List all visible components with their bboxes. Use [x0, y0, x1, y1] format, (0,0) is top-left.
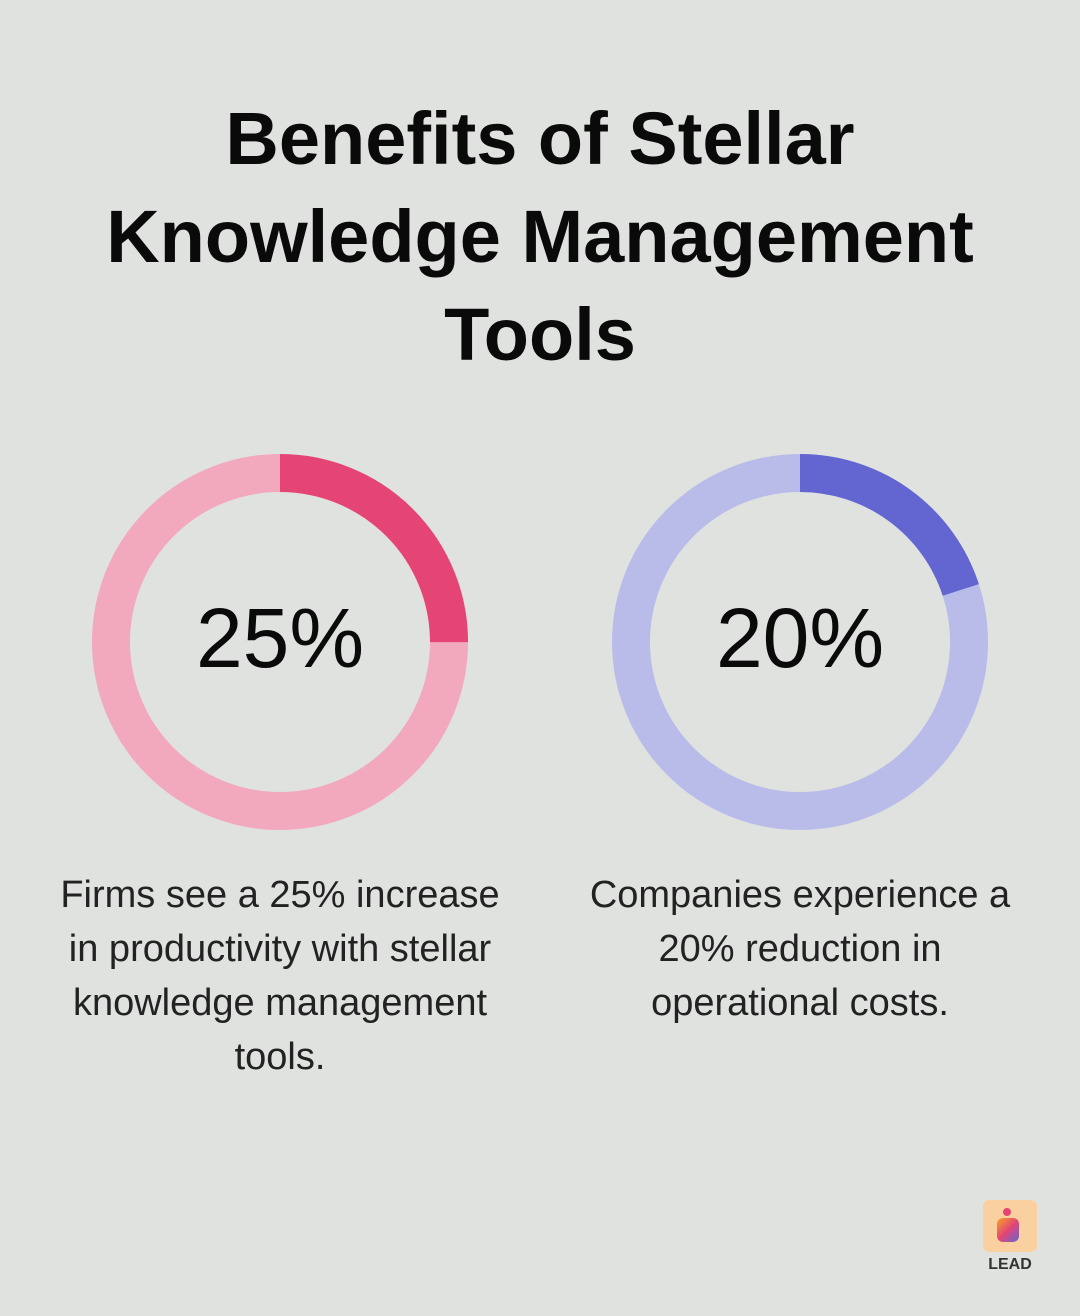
- text: productivity: Firms see a 25% increase in productivity with stellar knowledge management tools.: [60, 874, 500, 1078]
- title: [106, 97, 974, 376]
- logo: LEAD: [988, 1256, 1032, 1273]
- logo: [983, 1200, 1037, 1273]
- title: Tools: [444, 293, 636, 376]
- donut chart: 20%: 20%: [716, 591, 884, 685]
- title: Knowledge Management: [106, 195, 974, 278]
- title: Benefits of Stellar: [225, 97, 855, 180]
- donut chart: 25%: 25%: [196, 591, 364, 685]
- text: costs: Companies experience a 20% reduction in operational costs.: [590, 874, 1010, 1024]
